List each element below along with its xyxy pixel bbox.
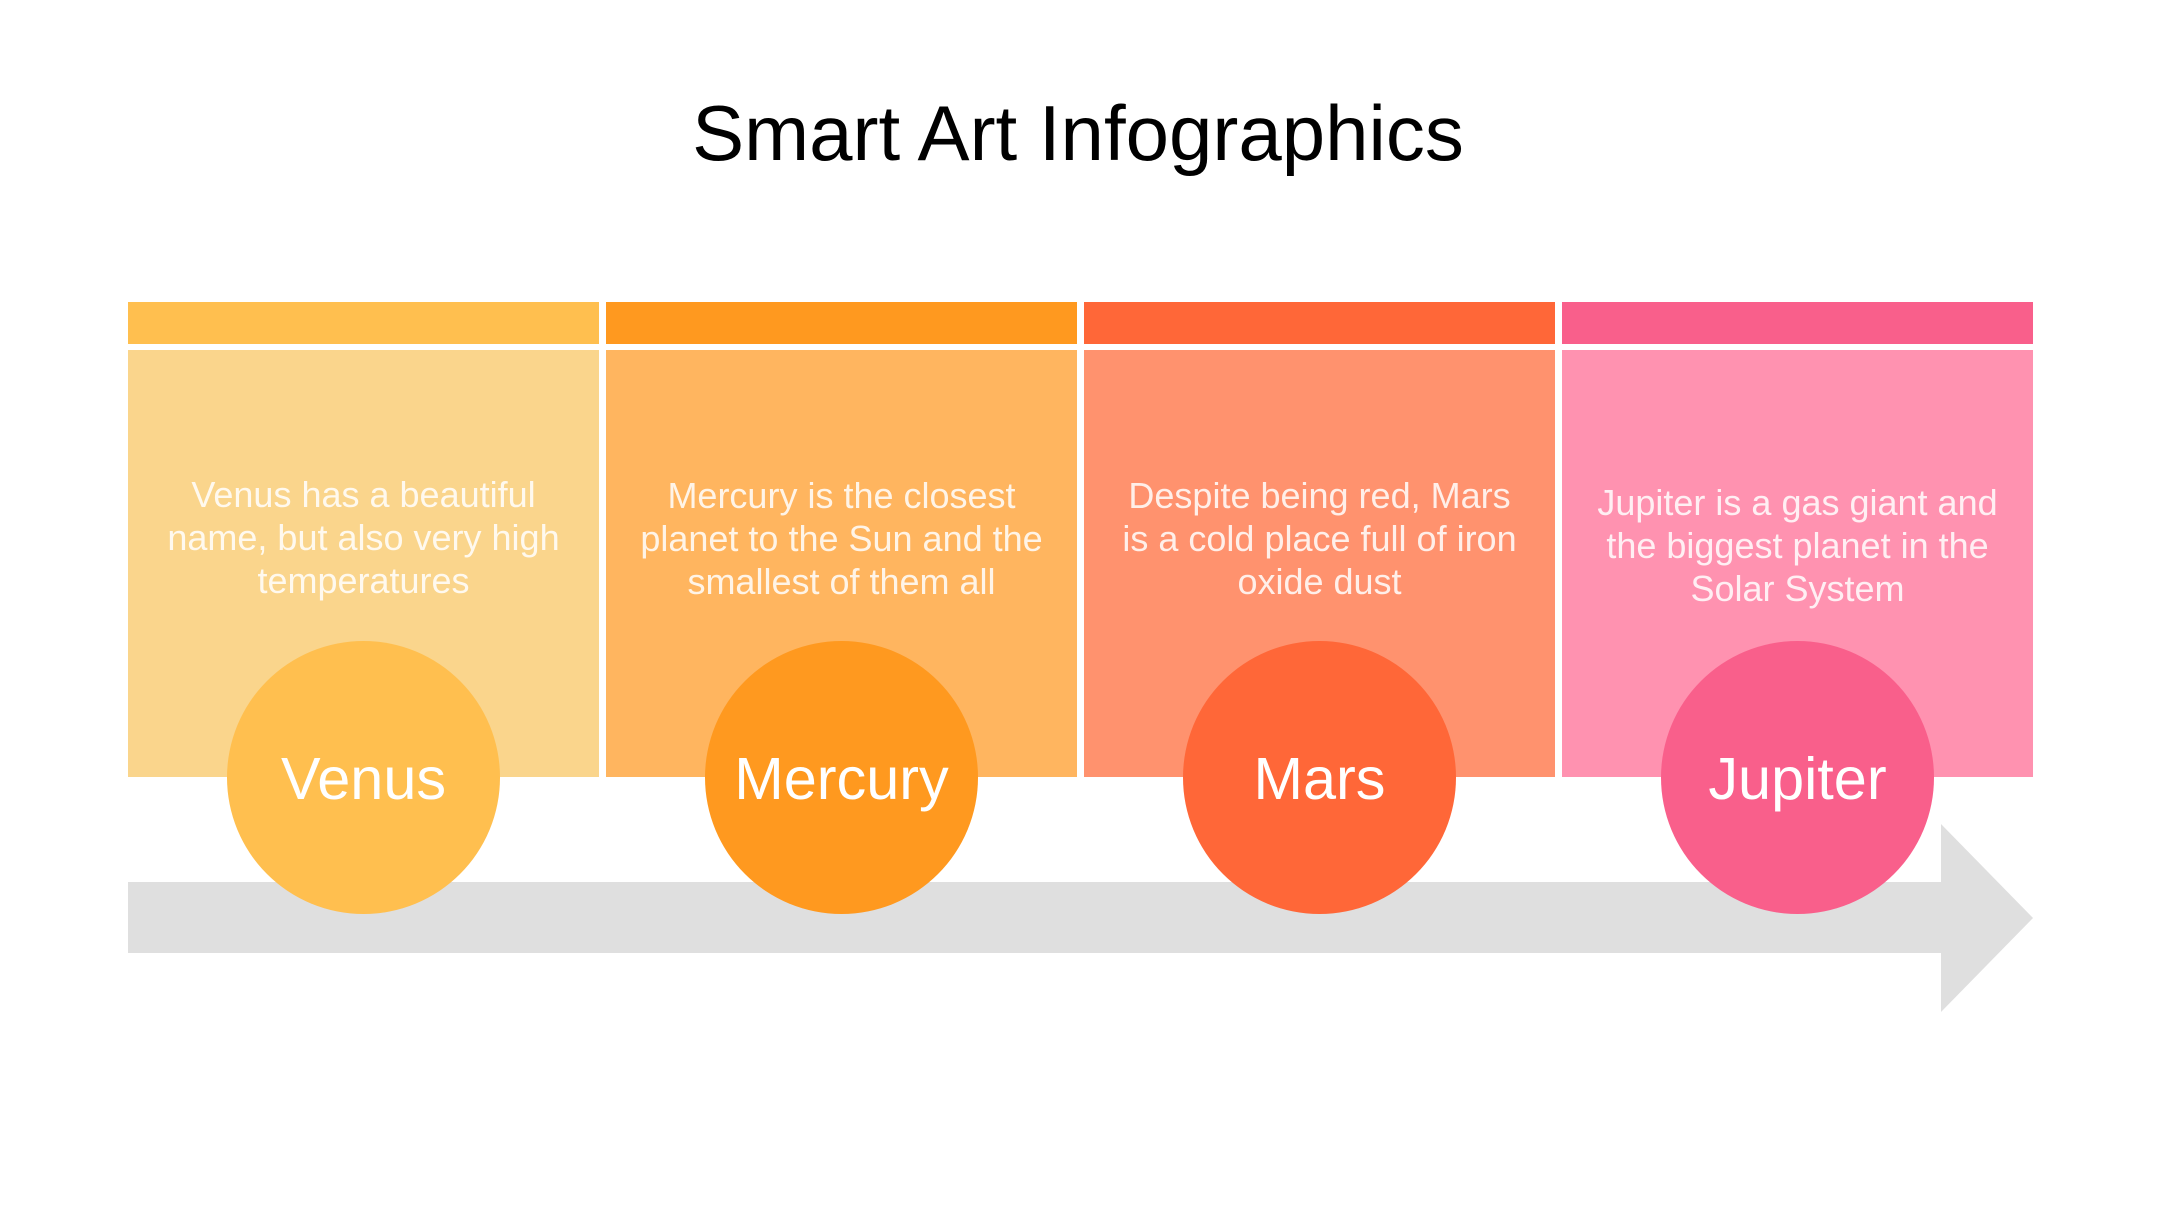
- Mercury circle: Mercury: [734, 745, 949, 812]
- Jupiter header bar: [1562, 302, 2033, 344]
- Mars header bar: [1084, 302, 1555, 344]
- Venus description: temperatures: [257, 560, 470, 601]
- title: Smart Art Infographics: [692, 89, 1464, 177]
- Mars body panel: [1084, 350, 1555, 777]
- Mars circle: Mars: [1254, 745, 1385, 812]
- panel: Mars: [1084, 302, 1555, 914]
- Venus circle: Venus: [281, 745, 446, 812]
- arrow: timeline: [128, 824, 2033, 1012]
- Venus description: [167, 474, 560, 601]
- Mercury circle: [705, 641, 978, 914]
- Mercury description: smallest of them all: [687, 561, 996, 602]
- Mars description: oxide dust: [1237, 561, 1402, 602]
- Mercury body panel: [606, 350, 1077, 777]
- panel: Jupiter: [1562, 302, 2033, 914]
- Jupiter circle: [1661, 641, 1934, 914]
- Mercury description: planet to the Sun and the: [640, 518, 1043, 559]
- Mercury description: [640, 474, 1043, 602]
- Venus circle: [227, 641, 500, 914]
- Mercury description: Mercury is the closest: [667, 474, 1016, 516]
- Mercury header bar: [606, 302, 1077, 344]
- Jupiter description: the biggest planet in the: [1606, 525, 1989, 566]
- Mars description: Despite being red, Mars: [1128, 474, 1511, 516]
- Venus description: name, but also very high: [167, 517, 560, 558]
- Jupiter description: Jupiter is a gas giant and: [1597, 482, 1998, 522]
- panel: Mercury: [606, 302, 1077, 914]
- Mars description: is a cold place full of iron: [1122, 518, 1517, 559]
- Jupiter body panel: [1562, 350, 2033, 777]
- panel: Venus: [128, 302, 599, 914]
- Venus description: Venus has a beautiful: [191, 474, 536, 514]
- Mars description: [1122, 474, 1517, 602]
- Venus body panel: [128, 350, 599, 777]
- Jupiter circle: Jupiter: [1708, 745, 1887, 812]
- Jupiter description: [1597, 482, 1998, 609]
- Mars circle: [1183, 641, 1456, 914]
- Jupiter description: Solar System: [1690, 568, 1905, 609]
- Venus header bar: [128, 302, 599, 344]
